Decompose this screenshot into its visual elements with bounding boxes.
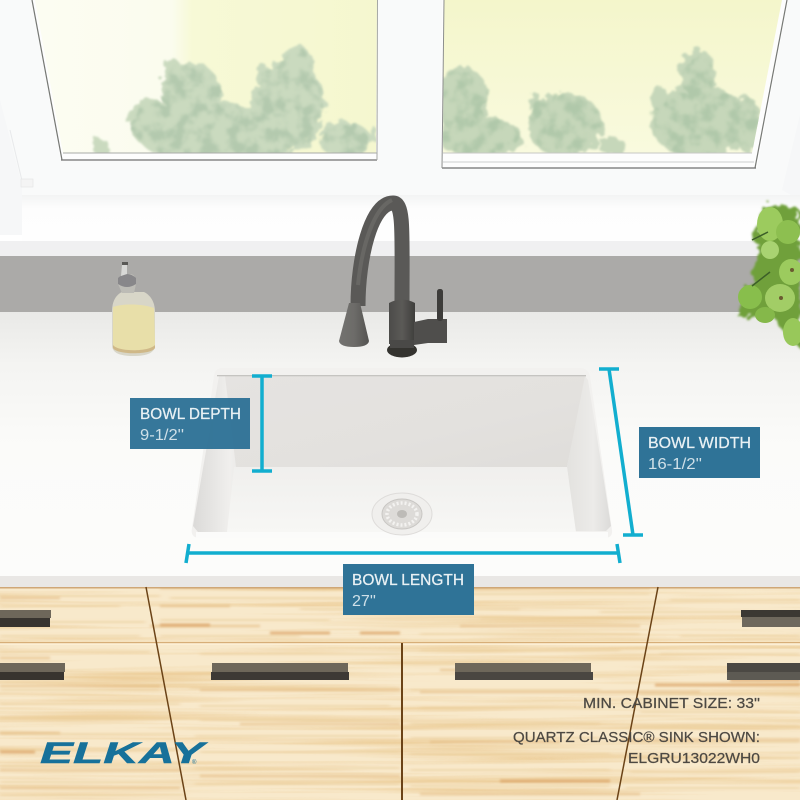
window frame and wall	[0, 0, 800, 235]
bush: left group foliage	[132, 47, 369, 162]
dimension line: bowl width	[599, 369, 643, 535]
bush: right group foliage	[443, 59, 758, 152]
label: bowl width: 16-1/2''	[648, 456, 702, 473]
horizontal drawer seam	[0, 587, 800, 645]
bush: left group base	[94, 45, 376, 164]
faucet body	[389, 300, 415, 344]
handle: lower left	[0, 663, 65, 680]
spec note: minimum cabinet size and model	[513, 695, 760, 767]
sink rim	[192, 368, 612, 538]
spec note: minimum cabinet size and model: QUARTZ CLASSIC® SINK SHOWN:	[513, 729, 760, 746]
wood panel	[0, 587, 800, 800]
backsplash	[0, 256, 800, 313]
label: bowl depth	[130, 398, 250, 449]
label: bowl depth: 9-1/2''	[140, 427, 184, 444]
dimension line: bowl length	[186, 544, 620, 563]
label: bowl depth: BOWL DEPTH	[140, 406, 241, 423]
sink left wall	[193, 376, 236, 532]
handle: lower right	[727, 663, 800, 680]
logo: Elkay	[40, 737, 209, 770]
label: bowl length: BOWL LENGTH	[352, 572, 464, 589]
sink back wall	[222, 376, 586, 467]
dimension line: bowl depth	[252, 376, 272, 471]
label: bowl width: BOWL WIDTH	[648, 435, 751, 452]
cabinets	[0, 587, 800, 800]
bush: right group base	[436, 49, 762, 158]
window sill	[0, 195, 800, 256]
faucet	[339, 200, 447, 358]
sink floor	[227, 467, 576, 532]
label: bowl width	[639, 427, 760, 478]
label: bowl length: 27''	[352, 593, 376, 610]
faucet handle	[414, 319, 447, 345]
pull-down spray cone	[339, 303, 369, 347]
logo: Elkay: ELKAY	[40, 737, 209, 770]
spec note: minimum cabinet size and model: ELGRU13022WH0	[628, 750, 760, 767]
cabinet door gaps	[146, 587, 658, 800]
window pane: right with bushes	[436, 0, 788, 168]
handle: center left	[211, 663, 349, 680]
label: bowl length	[343, 564, 474, 615]
sink right wall	[567, 376, 611, 531]
faucet arch	[358, 203, 402, 306]
handle: upper left	[0, 610, 51, 627]
handle: upper right	[741, 610, 800, 627]
plant	[737, 202, 800, 348]
logo: Elkay: ®	[192, 759, 197, 766]
spec note: minimum cabinet size and model: MIN. CABINET SIZE: 33''	[583, 695, 760, 712]
drain	[372, 493, 432, 535]
handle: center right	[455, 663, 593, 680]
soap bottle	[112, 262, 155, 356]
countertop	[0, 312, 800, 587]
faucet base	[387, 342, 417, 358]
sink	[192, 368, 612, 538]
window pane: left with bushes	[31, 0, 378, 164]
